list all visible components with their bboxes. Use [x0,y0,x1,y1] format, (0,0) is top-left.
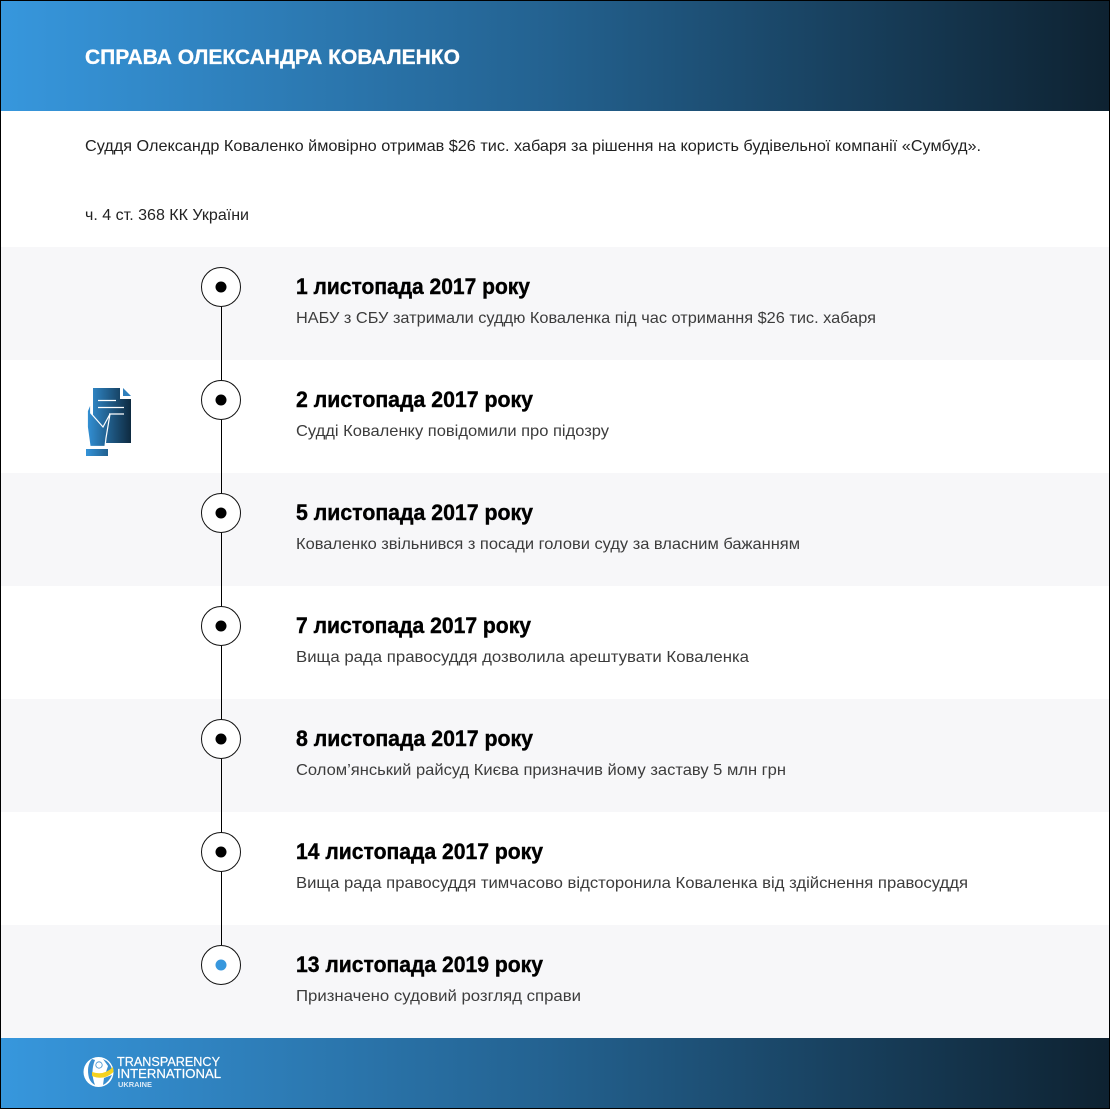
intro text: Суддя Олександр Коваленко ймовірно отримав $26 тис. хабаря за рішення на користь будівельної компанії «Сумбуд». [85,138,981,155]
event: 1 листопада 2017: НАБУ з СБУ затримали суддю Коваленка під час отримання $26 тис. хабаря [296,310,876,327]
footer banner [1,1038,1109,1108]
event: 13 листопада 2019: 13 листопада 2019 року [296,952,544,977]
timeline axis [220,287,222,945]
event: 13 листопада 2019: Призначено судовий розгляд справи [296,988,581,1005]
icon: hand holding document [86,388,131,456]
event: 8 листопада 2017: 8 листопада 2017 року [296,726,534,751]
event: 7 листопада 2017: 7 листопада 2017 року [296,613,532,638]
title: СПРАВА ОЛЕКСАНДРА КОВАЛЕНКО [85,46,460,69]
logo: Transparency International Ukraine [84,1055,221,1089]
event: 14 листопада 2017 [202,832,968,892]
event: 2 листопада 2017 [202,380,609,440]
event: 2 листопада 2017: 2 листопада 2017 року [296,387,534,412]
event: 2 листопада 2017: Судді Коваленку повідомили про підозру [296,423,609,440]
event: 7 листопада 2017: Вища рада правосуддя дозволила арештувати Коваленка [296,649,749,666]
event: 8 листопада 2017: Солом’янський райсуд Києва призначив йому заставу 5 млн грн [296,762,786,779]
event: 7 листопада 2017 [202,606,749,666]
event: 8 листопада 2017 [202,720,786,779]
event: 1 листопада 2017: 1 листопада 2017 року [296,274,531,299]
header banner [1,1,1109,111]
event: 14 листопада 2017: Вища рада правосуддя тимчасово відсторонила Коваленка від здійснення правосуддя [296,875,968,892]
event: 1 листопада 2017 [202,268,876,327]
logo: Transparency International Ukraine: INTERNATIONAL [117,1067,221,1081]
event: 13 листопада 2019 [202,946,581,1005]
event: 5 листопада 2017 [202,494,800,553]
legal article: ч. 4 ст. 368 КК України [85,207,249,224]
event: 14 листопада 2017: 14 листопада 2017 року [296,839,544,864]
logo: Transparency International Ukraine: TRANSPARENCY [117,1055,221,1069]
event: 5 листопада 2017: Коваленко звільнився з посади голови суду за власним бажанням [296,536,800,553]
event: 5 листопада 2017: 5 листопада 2017 року [296,500,534,525]
logo: Transparency International Ukraine: UKRAINE [118,1082,152,1089]
